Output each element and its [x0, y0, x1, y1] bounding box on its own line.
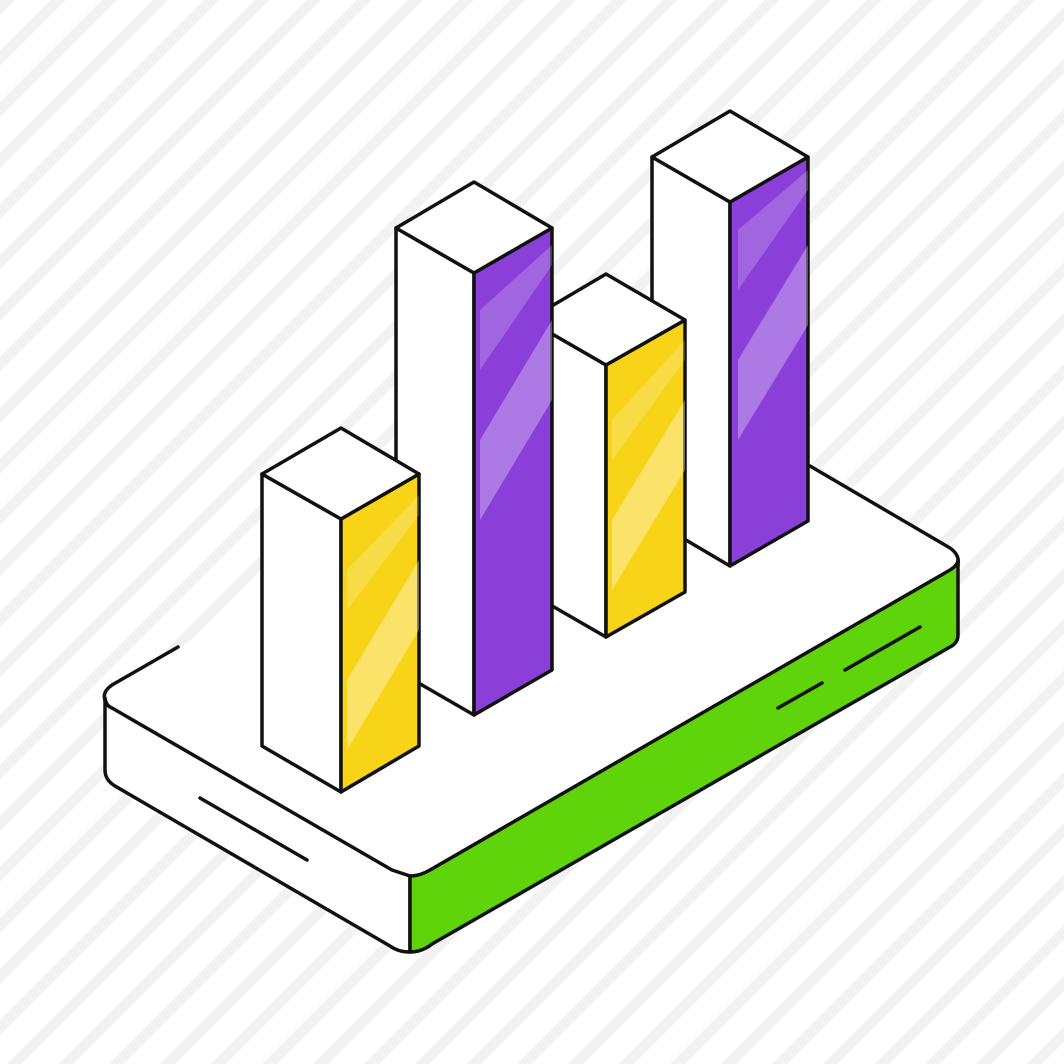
- platform dashes: [200, 627, 920, 860]
- platform: [104, 375, 958, 952]
- platform outline top edges: [104, 647, 178, 700]
- platform right face: [410, 560, 958, 952]
- platform top face: [106, 375, 956, 873]
- platform left face: [105, 698, 410, 952]
- bar 2 (tall, purple): [396, 182, 552, 715]
- bar 3 (middle, yellow): [528, 274, 685, 637]
- bar 1 (front left, yellow): [262, 428, 419, 792]
- bar 4 (back right, purple): [652, 111, 808, 566]
